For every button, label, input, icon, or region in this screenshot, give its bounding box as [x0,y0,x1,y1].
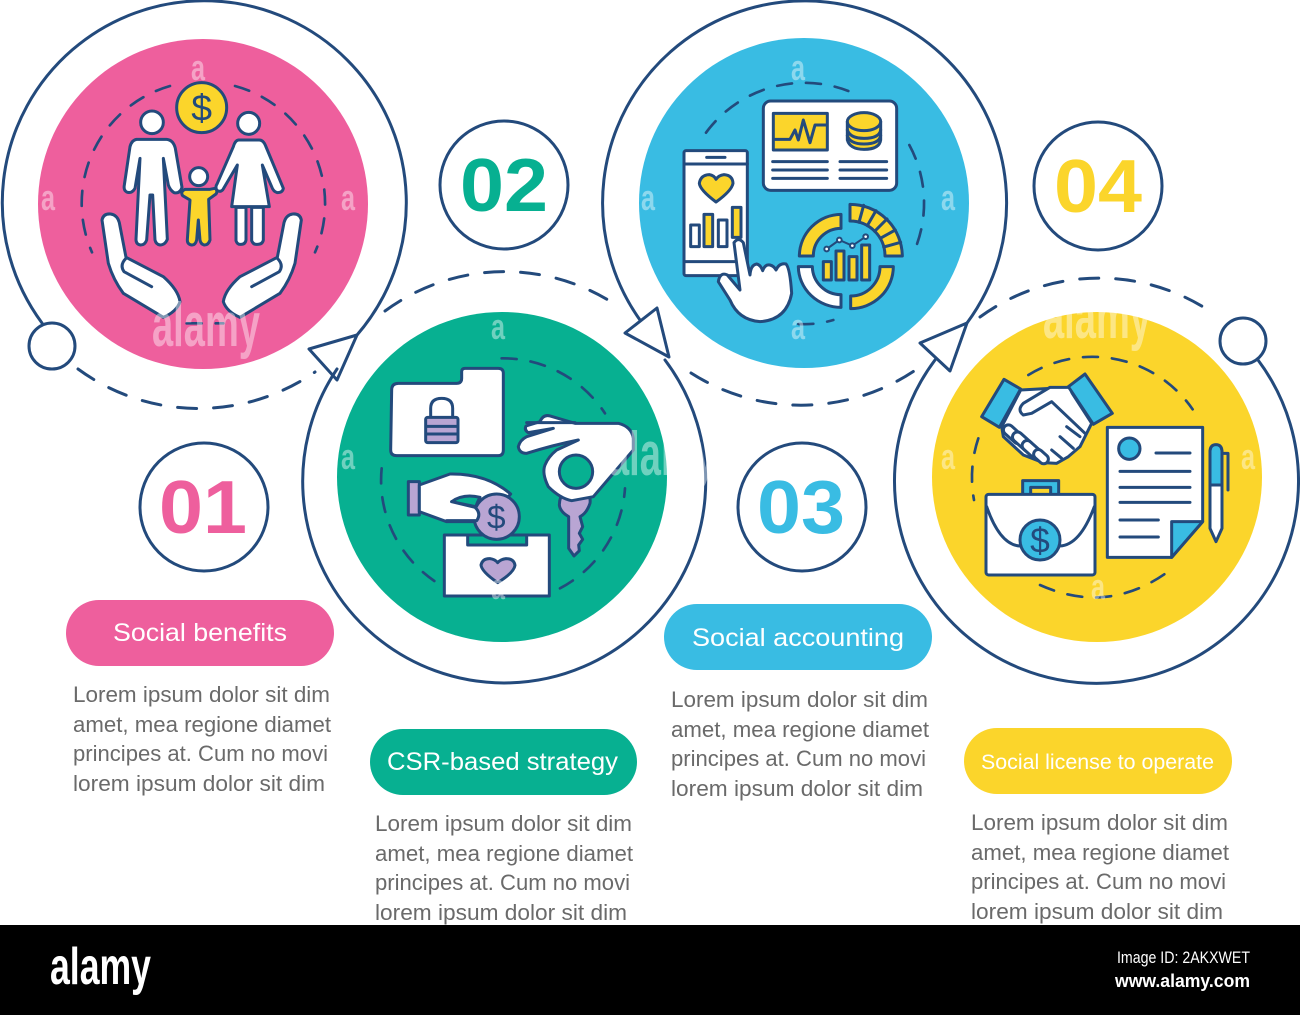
watermark marks: a [941,177,956,218]
body text 2 [375,811,633,925]
watermark marks: alamy [1043,283,1151,352]
body text 2: amet, mea regione diamet [375,841,633,866]
watermark marks: a [641,177,656,218]
watermark marks [41,47,1256,607]
ring end node [1220,318,1266,364]
watermark marks: a [41,177,56,218]
watermark marks: a [491,306,506,347]
body text 2: lorem ipsum dolor sit dim [375,900,627,925]
body text 1: amet, mea regione diamet [73,712,331,737]
watermark marks: a [341,436,356,477]
circle: yellow background [932,312,1262,642]
watermark marks: alamy [152,291,260,360]
watermark marks: a [941,436,956,477]
number circle 03: 03 [757,465,845,549]
arrow 2 [625,308,669,357]
pill label: CSR-based strategy: CSR-based strategy [387,748,619,776]
panel: step 2 CSR-based strategy [303,121,706,925]
number circle 04 [1034,122,1162,250]
watermark marks: alamy [608,420,716,489]
pill label: Social benefits: Social benefits [113,619,287,647]
outer ring 3 [603,1,1007,323]
body text 4: lorem ipsum dolor sit dim [971,899,1223,924]
number circle 02: 02 [460,143,548,227]
watermark marks: a [1091,566,1106,607]
number circle 02 [440,121,568,249]
watermark marks: a [191,47,206,88]
watermark marks: a [791,47,806,88]
pill label: CSR-based strategy [370,729,637,795]
body text 3: amet, mea regione diamet [671,717,929,742]
pill label: Social accounting [664,604,932,670]
watermark marks: a [491,566,506,607]
arrow 1 [309,335,357,380]
circle: pink background [38,39,368,369]
watermark marks: a [791,306,806,347]
body text 2: Lorem ipsum dolor sit dim [375,811,632,836]
body text 3: principes at. Cum no movi [671,746,926,771]
body text 1: lorem ipsum dolor sit dim [73,771,325,796]
body text 4 [971,810,1229,924]
dashed connector 3 [691,369,917,405]
number circle 03 [738,443,866,571]
pill label: Social license to operate: Social license to operate [981,751,1214,774]
panel: step 3 social accounting [603,1,1007,801]
icon: handshake, briefcase and contract: $ [1030,521,1050,560]
body text 4: Lorem ipsum dolor sit dim [971,810,1228,835]
outer ring 1 [2,1,406,335]
icon: family in caring hands with coin [82,83,325,323]
pill label: Social accounting: Social accounting [692,624,904,652]
body text 1 [73,682,331,796]
watermark marks: a [341,177,356,218]
outer ring 2 [303,360,706,683]
body text 4: amet, mea regione diamet [971,840,1229,865]
body text 3: Lorem ipsum dolor sit dim [671,687,928,712]
panel: step 4 social license to operate [895,122,1298,924]
arrow 3 [920,323,967,371]
icon: phone, report and charts [684,83,924,324]
footer logo: alamy [50,938,151,996]
icon: handshake, briefcase and contract [972,357,1228,597]
body text 3 [671,687,929,801]
footer bar [0,925,1300,1015]
number circle 01 [140,443,268,571]
number circle 01: 01 [159,465,247,549]
body text 3: lorem ipsum dolor sit dim [671,776,923,801]
pill label: Social license to operate [964,728,1232,794]
body text 2: principes at. Cum no movi [375,870,630,895]
dashed connector 1 [78,369,315,408]
image id: Image ID: 2AKXWET [1117,948,1250,967]
pill label: Social benefits [66,600,334,666]
circle: blue background [639,38,969,368]
icon: family in caring hands with coin: $ [191,87,212,129]
outer ring 4 [895,360,1298,683]
website: www.alamy.com [1114,971,1250,991]
icon: locked folder, donation and key: $ [487,499,506,536]
circle: green background [337,312,667,642]
body text 1: Lorem ipsum dolor sit dim [73,682,330,707]
dashed connector 4 [980,278,1205,317]
number circle 04: 04 [1054,144,1142,228]
icon: locked folder, donation and key [381,358,633,596]
panel: step 1 social benefits [2,1,406,796]
body text 4: principes at. Cum no movi [971,869,1226,894]
body text 1: principes at. Cum no movi [73,741,328,766]
dashed connector 2 [385,272,613,311]
watermark marks: a [1241,436,1256,477]
ring start node [29,323,75,369]
